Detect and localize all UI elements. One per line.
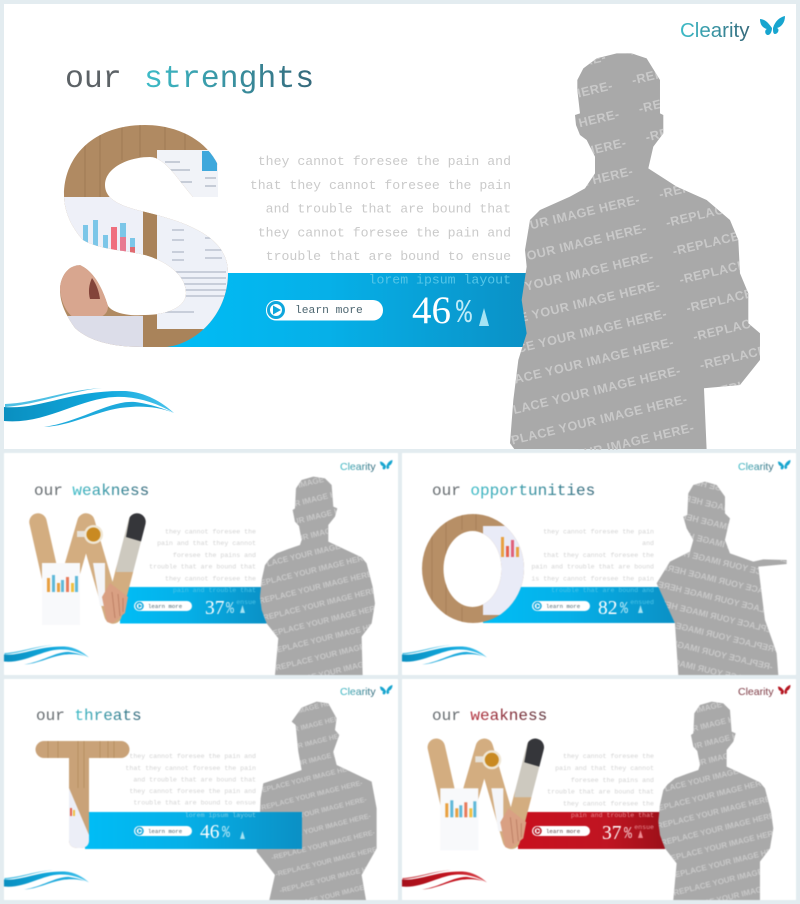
silhouette placeholder — [656, 481, 788, 676]
coffee cup — [77, 525, 103, 544]
stat 46%: % — [222, 825, 230, 843]
silhouette placeholder: -REPLACE YOUR IMAGE HERE- -REPLACE — [625, 664, 796, 714]
letter W photo — [28, 512, 146, 624]
body text: and trouble that are bound that — [266, 202, 511, 216]
title: our — [65, 62, 122, 97]
body text — [250, 154, 511, 288]
letter T photo — [34, 740, 130, 848]
silhouette placeholder — [510, 53, 760, 450]
title: our — [432, 707, 461, 725]
title: our — [34, 482, 63, 500]
silhouette placeholder: -REPLACE YOUR IMAGE HERE- -REPLACE — [254, 752, 404, 796]
stat 82%: 82 — [598, 598, 618, 619]
silhouette placeholder: -REPLACE YOUR IMAGE HERE- -REPLACE — [275, 835, 424, 878]
body text: they cannot foresee the pain and — [258, 226, 511, 240]
body text: they cannot foresee the pain and — [129, 788, 256, 795]
silhouette placeholder — [658, 701, 774, 900]
learn more button — [532, 826, 590, 836]
silhouette placeholder: -REPLACE YOUR IMAGE HERE- -REPLACE — [267, 802, 416, 845]
silhouette placeholder: -REPLACE YOUR IMAGE HERE- -REPLACE — [271, 818, 420, 862]
title — [432, 707, 547, 725]
stat 37%: % — [226, 601, 234, 619]
silhouette placeholder: -REPLACE YOUR IMAGE HERE- -REPLACE — [594, 583, 782, 637]
body text: they cannot foresee the pain — [543, 528, 654, 536]
title: weakness — [72, 482, 149, 500]
panel: our weakness (blue) — [3, 452, 398, 676]
silhouette placeholder: -REPLACE YOUR IMAGE HERE- -REPLACE — [268, 606, 439, 656]
logo: Clearity — [738, 686, 774, 698]
title — [36, 707, 142, 725]
body text: ensued — [630, 599, 654, 606]
stat 37%: 37 — [205, 598, 225, 619]
logo — [738, 685, 790, 698]
title — [65, 62, 314, 97]
body text: lorem ipsum layout — [185, 812, 256, 819]
stat 82%: % — [620, 601, 628, 619]
body text: trouble that are bound that — [149, 564, 256, 571]
silhouette placeholder: -REPLACE YOUR IMAGE HERE- -REPLACE — [238, 686, 387, 730]
silhouette placeholder: -REPLACE YOUR IMAGE HERE- -REPLACE — [582, 635, 770, 689]
silhouette placeholder: -REPLACE YOUR IMAGE HERE- -REPLACE — [246, 719, 396, 763]
stat 37%: % — [624, 826, 632, 844]
panel: our strenghts — [4, 0, 800, 481]
body text: they cannot foresee the — [165, 528, 256, 536]
silhouette placeholder: -REPLACE YOUR IMAGE HERE- -REPLACE — [227, 439, 398, 489]
logo: Clearity — [340, 461, 376, 473]
logo: Clearity — [340, 686, 376, 698]
body text: pain and that they cannot — [157, 540, 256, 547]
logo: Clearity — [738, 461, 774, 473]
body text: that they cannot foresee the pain — [250, 178, 511, 193]
stat 37% — [205, 598, 245, 619]
body text: trouble that are bound to ensue — [266, 249, 511, 264]
silhouette placeholder: -REPLACE YOUR IMAGE HERE- -REPLACE — [263, 785, 412, 829]
silhouette placeholder: -REPLACE YOUR IMAGE HERE- -REPLACE — [590, 600, 778, 654]
logo — [738, 460, 790, 473]
stat 82% — [598, 598, 643, 619]
body text: is they cannot foresee the pain — [531, 575, 654, 582]
stat 37% — [602, 823, 643, 844]
silhouette placeholder: -REPLACE YOUR IMAGE HERE- -REPLACE — [231, 456, 402, 506]
body text — [125, 753, 256, 819]
silhouette placeholder: -REPLACE YOUR IMAGE HERE- -REPLACE — [633, 698, 800, 748]
body text: pain and that they cannot — [555, 765, 654, 772]
letter W photo — [426, 738, 545, 850]
learn more button — [134, 601, 192, 611]
title: our — [432, 482, 461, 500]
panel: our opportunities — [401, 452, 796, 676]
wave — [4, 870, 89, 890]
silhouette placeholder: -REPLACE YOUR IMAGE HERE- -REPLACE — [629, 681, 800, 731]
logo — [680, 16, 785, 42]
silhouette placeholder — [256, 701, 378, 900]
blue bar — [120, 587, 267, 624]
stat 46%: 46 — [200, 822, 220, 843]
silhouette placeholder: -REPLACE YOUR IMAGE HERE- -REPLACE — [611, 513, 799, 567]
body text: they cannot foresee the — [165, 575, 256, 582]
stat 46% — [412, 289, 489, 332]
wave — [402, 645, 487, 664]
silhouette placeholder: -REPLACE YOUR IMAGE HERE- -REPLACE — [242, 703, 391, 746]
title: opportunities — [470, 482, 595, 500]
title: threats — [74, 707, 142, 725]
body text: they cannot foresee the pain and — [258, 154, 511, 169]
silhouette placeholder: -REPLACE YOUR IMAGE HERE- -REPLACE — [586, 618, 774, 672]
learn more button: learn more — [546, 603, 581, 610]
title: strenghts — [144, 62, 314, 97]
silhouette placeholder: -REPLACE YOUR IMAGE HERE- -REPLACE — [256, 556, 427, 606]
silhouette placeholder: -REPLACE YOUR IMAGE HERE- -REPLACE — [264, 589, 435, 640]
body text: they cannot foresee the pain and — [129, 753, 256, 760]
blue bar — [85, 812, 302, 849]
logo — [340, 685, 392, 698]
body text — [531, 528, 654, 606]
silhouette placeholder: -REPLACE YOUR IMAGE HERE- -REPLACE — [239, 489, 411, 540]
learn more button — [134, 826, 192, 836]
body text: pain and trouble that are bound — [531, 564, 654, 571]
learn more button: learn more — [148, 603, 183, 610]
learn more button — [266, 300, 383, 320]
body text — [547, 753, 654, 831]
learn more button: learn more — [295, 305, 363, 317]
wave — [402, 870, 487, 890]
blue bar — [160, 273, 532, 347]
panel: our weakness (red) — [402, 664, 800, 904]
silhouette placeholder — [259, 476, 376, 676]
silhouette placeholder: -REPLACE YOUR IMAGE HERE- -REPLACE — [279, 851, 428, 895]
body text: and — [642, 540, 654, 547]
title: weakness — [470, 707, 547, 725]
body text: foresee the pains and — [571, 777, 654, 784]
body text: ensue — [634, 824, 654, 831]
body text: trouble that are bound that — [547, 789, 654, 796]
body text: ensue — [236, 599, 256, 606]
silhouette placeholder: -REPLACE YOUR IMAGE HERE- -REPLACE — [243, 506, 415, 556]
silhouette placeholder: -REPLACE YOUR IMAGE HERE- -REPLACE — [258, 769, 408, 812]
title: our — [36, 707, 65, 725]
silhouette placeholder: -REPLACE YOUR IMAGE HERE- -REPLACE — [272, 623, 443, 673]
silhouette placeholder: -REPLACE YOUR IMAGE HERE- -REPLACE — [235, 473, 406, 523]
body text: that they cannot foresee the pain — [125, 765, 256, 772]
stat 46% — [200, 822, 245, 843]
silhouette placeholder: -REPLACE YOUR IMAGE HERE- -REPLACE — [250, 736, 400, 779]
silhouette placeholder: -REPLACE YOUR IMAGE HERE- -REPLACE — [247, 523, 419, 573]
learn more button: learn more — [148, 828, 183, 835]
wave — [4, 388, 174, 427]
blue bar — [483, 587, 675, 623]
body text: lorem ipsum layout — [369, 272, 511, 288]
stat 37%: 37 — [602, 823, 622, 844]
title — [34, 482, 149, 500]
silhouette placeholder: -REPLACE YOUR IMAGE HERE- -REPLACE — [276, 640, 447, 690]
silhouette placeholder: -REPLACE YOUR IMAGE HERE- -REPLACE — [607, 530, 795, 584]
red bar — [518, 812, 665, 849]
stat 46%: % — [456, 294, 472, 332]
silhouette placeholder: -REPLACE YOUR IMAGE HERE- -REPLACE — [603, 548, 791, 602]
silhouette placeholder: -REPLACE YOUR IMAGE HERE- -REPLACE — [251, 539, 423, 590]
body text: pain and trouble that — [173, 587, 256, 594]
body text: trouble that are bound and — [551, 587, 654, 594]
silhouette placeholder: -REPLACE YOUR IMAGE HERE- -REPLACE — [615, 495, 800, 549]
body text — [149, 528, 256, 606]
body text: that they cannot foresee the — [543, 552, 654, 559]
body text: foresee the pains and — [173, 552, 256, 559]
logo — [340, 460, 392, 473]
learn more button: learn more — [546, 828, 581, 835]
body text: trouble that are bound to ensue — [133, 800, 256, 807]
stat 46%: 46 — [412, 289, 451, 332]
wave — [4, 645, 89, 664]
body text: they cannot foresee the — [563, 753, 654, 760]
letter S photo — [60, 125, 228, 347]
panel: our threats — [4, 679, 434, 904]
learn more button — [532, 601, 590, 611]
silhouette placeholder: -REPLACE YOUR IMAGE HERE- -REPLACE — [260, 573, 431, 623]
letter O photo — [420, 510, 528, 626]
body text: pain and trouble that — [571, 812, 654, 819]
body text: they cannot foresee the — [563, 800, 654, 807]
silhouette placeholder: -REPLACE YOUR IMAGE HERE- -REPLACE — [598, 565, 786, 619]
logo: Clearity — [680, 19, 750, 42]
body text: and trouble that are bound that — [133, 776, 256, 784]
